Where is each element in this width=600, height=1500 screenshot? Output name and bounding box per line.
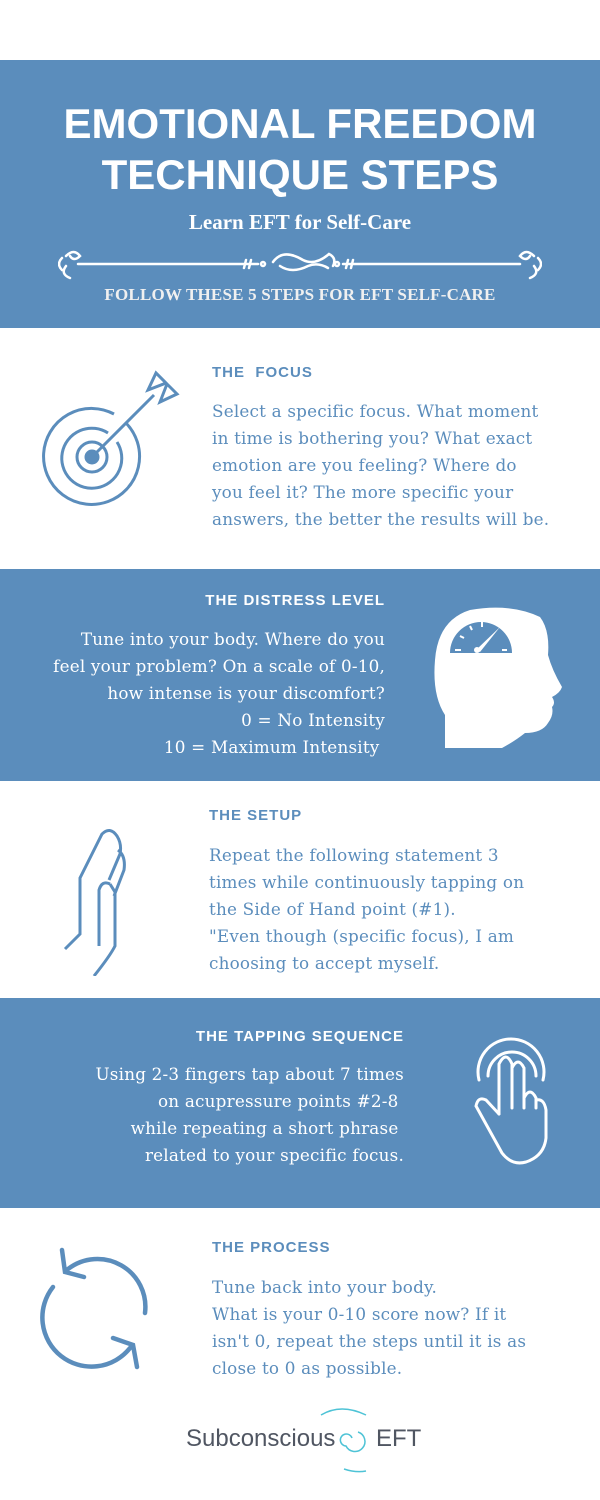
text: Tune back into your body.: [212, 1277, 437, 1297]
text: [209, 845, 524, 973]
text: Select a specific focus. What moment: [212, 401, 538, 421]
subtitle: Learn EFT for Self-Care: [189, 210, 411, 234]
panel: setup: [64, 807, 524, 976]
text: Using 2-3 fingers tap about 7 times: [95, 1064, 404, 1084]
text: What is your 0-10 score now? If it: [212, 1304, 506, 1324]
text: answers, the better the results will be.: [212, 509, 549, 529]
text: on acupressure points #2-8: [158, 1091, 398, 1111]
icon: target: [42, 370, 180, 506]
tagline: FOLLOW THESE 5 STEPS FOR EFT SELF-CARE: [104, 285, 496, 304]
text: related to your specific focus.: [145, 1145, 404, 1165]
heading: THE PROCESS: [212, 1239, 331, 1256]
header panel: [0, 60, 600, 328]
text: you feel it? The more specific your: [212, 482, 513, 502]
text: [212, 401, 549, 529]
text: "Even though (specific focus), I am: [209, 926, 514, 946]
text: isn't 0, repeat the steps until it is as: [212, 1331, 526, 1351]
text: feel your problem? On a scale of 0-10,: [53, 656, 385, 676]
text: 0 = No Intensity: [241, 710, 385, 730]
logo text: Subconscious: [186, 1425, 335, 1452]
logo: [186, 1408, 421, 1472]
heading: THE SETUP: [209, 807, 302, 824]
text: while repeating a short phrase: [131, 1118, 398, 1138]
text: choosing to accept myself.: [209, 953, 439, 973]
title: [64, 100, 536, 198]
logo text EFT: EFT: [376, 1425, 421, 1452]
title: EMOTIONAL FREEDOM: [64, 100, 536, 147]
icon: tapping hand: [474, 1038, 548, 1164]
text: [53, 629, 385, 757]
icon: hand: [64, 829, 126, 976]
text: Repeat the following statement 3: [209, 845, 499, 865]
icon: cycle arrows: [40, 1248, 148, 1370]
text: in time is bothering you? What exact: [212, 428, 532, 448]
text: the Side of Hand point (#1).: [209, 899, 456, 919]
title: TECHNIQUE STEPS: [102, 151, 498, 198]
icon: head with gauge: [434, 608, 562, 748]
heading: THE TAPPING SEQUENCE: [196, 1028, 404, 1045]
icon: swirl: [320, 1408, 366, 1472]
text: times while continuously tapping on: [209, 872, 524, 892]
text: emotion are you feeling? Where do: [212, 455, 517, 475]
text: close to 0 as possible.: [212, 1358, 402, 1378]
text: [212, 1277, 526, 1378]
ornament divider: [58, 250, 542, 280]
heading: THE DISTRESS LEVEL: [205, 592, 385, 609]
panel: distress level: [0, 569, 600, 781]
panel: focus: [42, 364, 549, 529]
text: [95, 1064, 404, 1165]
heading: THE FOCUS: [212, 364, 313, 381]
text: how intense is your discomfort?: [107, 683, 385, 703]
text: Tune into your body. Where do you: [81, 629, 385, 649]
panel: tapping sequence: [0, 998, 600, 1208]
text: 10 = Maximum Intensity: [164, 737, 379, 757]
panel: process: [40, 1239, 526, 1378]
